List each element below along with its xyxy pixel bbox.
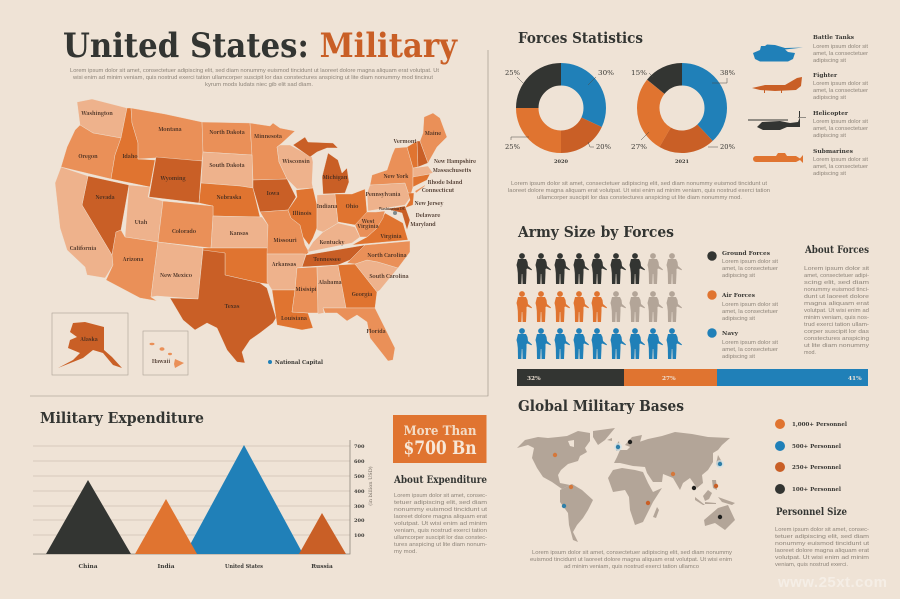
battle tanks text [813,35,868,64]
heading: About Expenditure: About Expenditure [393,475,487,486]
state: Ohio [335,189,367,225]
forces statistics text [508,181,770,201]
state: Arkansas [267,254,306,290]
title: United States: Military [63,26,458,66]
triangle: China [46,480,131,554]
icon: submarine [753,153,803,163]
legend: ground forces: amet, la consectetuer [722,266,778,272]
legend: navy: Lorem ipsum dolor sit [722,340,778,346]
state: Michigan lower [322,153,349,194]
map state labels: Maryland [410,221,436,228]
personnel legend [775,419,848,494]
legend: air forces: Air Forces [721,293,756,299]
about forces text: nonummy euismod tinci- [804,287,869,293]
map state labels: California [70,245,97,252]
forces statistics text: Lorem ipsum dolor sit amet, consectetuer adipiscing elit, sed diam nonummy euismod tincidunt ut [511,181,767,187]
global bases text [530,550,732,570]
Africa [608,468,662,525]
map state labels: Oregon [78,153,98,160]
battle tanks text: amet, la consectetuer [813,51,868,57]
donut chart 2020: 25% [505,69,521,77]
heading: About Forces: About Forces [804,245,869,256]
state: Mississippi [292,267,318,313]
map state labels: South Dakota [209,162,246,169]
about forces text: magna aliquam erat [804,301,869,307]
donut chart 2021 [631,60,736,165]
title intro text [70,68,439,88]
map state labels: Utah [135,219,148,226]
fighter text: Lorem ipsum dolor sit [813,81,868,87]
about forces text: corper suscipit lor das [804,329,869,335]
map state labels: Washington DC [379,206,406,211]
state: Georgia [338,264,377,308]
legend: navy: amet, la consectetuer [722,347,778,353]
forces statistics text: ullamcorper suscipit lor das constectures anspicing ut lite diam nonummy mod. [537,195,742,201]
map state labels: Kansas [230,230,249,237]
legend: ground forces [707,251,778,279]
category labels: China [78,564,98,570]
legend: navy: adipiscing sit [722,354,755,360]
New Guinea [718,497,735,505]
fighter text: amet, la consectetuer [813,88,868,94]
state: Washington [77,99,127,138]
national capital marker on map [393,211,397,215]
Madagascar [653,507,659,518]
heading: Personnel Size: Personnel Size [776,507,847,518]
icon: fighter jet [752,77,802,93]
helicopter text: Helicopter [813,111,849,117]
personnel size text: Lorem ipsum dolor sit amet, consec- [775,527,869,533]
fighter text [813,73,868,101]
state: North Dakota [202,122,252,155]
heading: Military Expenditure: Military Expenditure [40,409,204,427]
soldier icons: navy row [516,328,682,359]
legend: ground forces: Ground Forces [722,251,771,257]
helicopter text: Lorem ipsum dolor sit [813,119,868,125]
map state labels: Arkansas [272,261,297,268]
state: Minnesota [250,123,295,180]
Java [705,502,716,504]
state: New York [370,147,413,198]
stacked percent bar: 27% [662,376,676,382]
icon: battle tank [753,44,803,62]
about expenditure text: my mod. [394,549,417,555]
map state labels: Indiana [317,203,338,210]
state: Kansas [211,216,268,248]
donut chart 2021: 2021 [675,159,689,165]
title intro text: kyrum mods ludats niec gib elit sad diam. [205,82,313,88]
personnel size text: laoreet dolore magna aliquam erat [775,548,869,554]
map state labels: Virginia [357,223,380,230]
state: North Carolina [347,241,410,268]
map state labels: South Carolina [369,273,410,280]
map state labels [70,110,476,335]
state: New Jersey [405,193,414,208]
personnel size text: volutpat. Ut wisi enim ad minim [775,555,869,561]
about expenditure text: tures anspicing ut lite diam nonum- [394,542,487,548]
fighter text: adipiscing sit [813,95,846,101]
triangle: India [135,499,197,554]
about forces text: dunt ut laoreet dolore [804,294,869,300]
map state labels: Connecticut [422,187,455,194]
map state labels: New Jersey [414,200,444,207]
North America [517,431,590,489]
legend: air forces: Lorem ipsum dolor sit [722,302,778,308]
about expenditure text: volutpat. Ut wisi enim ad minim [394,521,487,527]
map state labels: Wyoming [160,175,186,182]
Eurasia [614,432,730,490]
map state labels: Nebraska [217,194,242,201]
callout: More Than $700 Bn [393,415,486,463]
stacked percent bar: 41% [848,376,862,382]
map state labels: Wisconsin [282,158,310,165]
donut chart 2021: 27% [631,143,648,151]
state: Wisconsin [277,145,313,189]
forces statistics text: laoreet dolore magna aliquam erat volutpat. Ut wisi enim ad minim veniam, quis nostrud exerci tation [508,188,770,194]
state: Tennessee [302,245,365,267]
heading: Global Military Bases: Global Military Bases [518,397,684,415]
category labels: India [158,564,175,570]
personnel legend: 500+ Personnel [792,444,842,450]
state: Michigan upper [293,137,338,157]
state: Iowa [253,179,296,212]
map state labels: North Carolina [367,252,408,259]
legend: air forces: adipiscing sit [722,316,755,322]
state: Connecticut and Rhode Island [413,174,430,187]
donut chart 2021: 15% [631,69,648,77]
legend: ground forces: Lorem ipsum dolor sit [722,259,778,265]
state: Pennsylvania [367,183,410,211]
Alaska inset: Alaska [80,336,99,343]
state: Nevada [82,176,129,255]
about expenditure text [394,493,487,555]
state: Colorado [158,201,213,248]
soldier icons: ground forces row [516,253,682,284]
Scandinavia [625,435,642,448]
category labels [78,564,333,570]
map state labels: Tennessee [313,256,341,263]
axis values: 400 [354,489,365,495]
axis values: 200 [354,518,365,524]
state: South Dakota [201,152,253,188]
about forces text: minim veniam, quis nos- [804,315,869,321]
submarines text [813,149,868,177]
state: Idaho [111,108,155,187]
map state labels: Texas [225,303,240,310]
map state labels: Idaho [122,153,138,160]
helicopter text: amet, la consectetuer [813,126,868,132]
battle tanks text: Lorem ipsum dolor sit [813,44,868,50]
legend: air forces [707,290,778,322]
UK [616,441,620,451]
about forces text: volutpat. Ut wisi enim ad [804,308,869,314]
donut chart 2020: 2020 [554,159,568,165]
state: Texas [170,250,276,363]
axis values: 600 [354,459,365,465]
about forces text: constectures anspicing [804,336,869,342]
Sumatra [695,497,705,505]
state: New Hampshire [417,141,428,167]
state: Alabama [317,265,346,314]
category labels: United States [225,564,264,570]
global bases text: Lorem ipsum dolor sit amet, consectetuer adipiscing elit, sed diam nonummy [532,550,732,556]
map state labels: Nevada [95,194,116,201]
state: Virginia [352,213,408,245]
state: California [55,167,113,278]
legend: ground forces: adipiscing sit [722,273,755,279]
about forces text: amet, consectetuer adipi- [804,273,869,279]
axis values [354,444,365,539]
callout: More Than $700 Bn: $700 Bn [404,438,477,459]
axis values: 100 [354,533,365,539]
donut chart 2020: 30% [598,69,615,77]
personnel legend: 250+ Personnel [792,465,842,471]
map state labels: Missouri [273,237,297,244]
state: Nebraska [199,183,260,217]
axis values: 500 [354,474,365,480]
about forces text: scing elit, sed diam [804,280,869,286]
global bases text: euismod tincidunt ut laoreet dolore magna aliquam erat volutpat. Ut wisi enim [530,557,732,563]
axis title: (in billion USD) [367,466,374,506]
state: New Mexico [151,242,203,299]
title intro text: wisi enim ad minim veniam, quis nostrud exerci tation ullamcorper suscipit lor das constectures anspicing ut lite diam nonummy mod tincinut [72,75,433,81]
map state labels: Arizona [123,256,144,263]
map state labels: New Hampshire [434,158,476,165]
donut chart 2021: 38% [720,69,736,77]
map state labels: Rhode Island [428,179,463,186]
state: Florida [323,308,395,361]
about expenditure text: nonummy euismod tincidunt ut [394,507,487,513]
legend: navy [707,328,778,360]
map state labels: Michigan [323,174,348,181]
state: Utah [125,185,163,242]
personnel size text: tetuer adipiscing elit, sed diam [775,534,869,540]
South America [560,484,593,542]
state: Maine [420,113,447,163]
state: South Carolina [355,260,398,292]
map state labels: Massachusetts [433,167,472,174]
Philippines [712,480,717,490]
about expenditure text: laoreet dolore magna aliquam erat [394,514,487,520]
about expenditure text: tetuer adipiscing elit, sed diam [394,500,487,506]
map state labels: Minnesota [254,133,283,140]
personnel size text [775,527,869,568]
about forces text: mod. [804,350,816,356]
Hawaii inset [143,331,188,375]
battle tanks text: adipiscing sit [813,58,846,64]
submarines text: amet, la consectetuer [813,164,868,170]
map state labels: Illinois [293,210,312,217]
about expenditure text: veniam, quis nostrud exerci tation [394,528,487,534]
map state labels: Virginia [380,233,403,240]
watermark: www.25xt.com [777,574,887,591]
map state labels: Georgia [352,291,373,298]
map state labels: West [362,218,375,225]
map state labels: Colorado [172,228,197,235]
heading: Forces Statistics: Forces Statistics [518,29,643,47]
category labels: Russia [311,564,333,570]
national capital legend: National Capital [275,360,324,366]
battle tanks text: Battle Tanks [813,35,855,41]
about forces text: trud exerci tation ullam- [804,322,869,328]
Borneo [703,490,712,501]
map state labels: Kentucky [319,239,345,246]
global bases text: ad minim veniam, quis nostrud exerci tation ullamco [564,564,699,570]
state: Montana [131,108,203,161]
state: Illinois [288,188,317,245]
state: Indiana [317,194,338,232]
map state labels: Montana [158,126,183,133]
state: Maryland and Delaware [376,206,410,230]
personnel legend: 1,000+ Personnel [792,422,848,428]
map state labels: Florida [366,328,387,335]
Iceland [607,438,612,441]
soldier icons: air forces row [516,291,682,322]
personnel size text: nonummy euismod tincidunt ut [775,541,869,547]
state: Massachusetts [413,166,433,178]
map state labels: Misisipi [295,286,317,293]
Greenland [593,428,615,445]
map state labels: Maine [425,130,441,137]
triangle: Russia [299,513,346,554]
state: Oregon [61,125,121,179]
map state labels: Alabama [318,279,343,286]
state: Louisiana [272,290,313,330]
helicopter text [813,111,868,139]
stacked percent bar: 32% [527,376,541,382]
about forces text: Lorem ipsum dolor sit [804,266,869,272]
map state labels: Pennsylvania [366,191,401,198]
base markers on world map [553,440,724,519]
about forces text: ut lite diam nonummy [804,343,869,349]
state: West Virginia [355,211,385,237]
Hudson Bay cutout [568,440,574,447]
about forces text [804,266,869,356]
personnel legend: 100+ Personnel [792,487,842,493]
submarines text: adipiscing sit [813,171,846,177]
about expenditure text: Lorem ipsum dolor sit amet, consec- [394,493,487,499]
world map [517,428,735,542]
map state labels: New Mexico [160,272,193,279]
axis values: 700 [354,444,365,450]
US map [55,99,447,363]
map state labels: New York [383,173,409,180]
frame around map panel [30,50,488,396]
state: Oklahoma [203,248,268,284]
map state labels: Vermont [394,138,417,145]
about expenditure text: ullamcorper suscipit lor das constec- [394,535,487,541]
Australia [704,505,735,530]
axis values: 300 [354,504,365,510]
Alaska inset [52,313,128,375]
state: Kentucky [308,223,360,252]
Hawaii inset: Hawaii [152,358,170,365]
submarines text: Submarines [813,149,854,155]
donut chart 2020: 25% [505,143,521,151]
state: Missouri [260,210,309,255]
icon: helicopter [748,111,806,130]
stacked percent bar [517,369,868,386]
legend: air forces: amet, la consectetuer [722,309,778,315]
personnel size text: veniam, quis nostrud exerci. [775,562,848,568]
heading: Army Size by Forces: Army Size by Forces [517,223,674,241]
callout: More Than $700 Bn: More Than [404,424,477,439]
submarines text: Lorem ipsum dolor sit [813,157,868,163]
fighter text: Fighter [813,73,838,79]
donut chart 2020 [505,63,615,165]
donut chart 2021: 20% [720,143,736,151]
map state labels: Louisiana [281,315,308,322]
donut chart 2020: 20% [596,143,612,151]
map state labels: Iowa [267,190,280,197]
title intro text: Lorem ipsum dolor sit amet, consectetuer adipiscing elit, sed diam nonummy euismod tincidunt ut laoreet dolore magna aliquam erat volutpat. Ut [70,68,439,74]
map state labels: North Dakota [209,129,246,136]
Japan [716,455,722,467]
triangle: United States [185,445,303,554]
map state labels: Delaware [416,212,440,219]
map state labels: Washington [81,110,113,117]
map state labels: Ohio [346,203,359,210]
state: Long Island [415,185,425,193]
helicopter text: adipiscing sit [813,133,846,139]
legend: navy: Navy [722,331,739,337]
state: Vermont [407,141,418,168]
expenditure chart [33,440,374,570]
state: Wyoming [149,157,202,203]
state: Arizona [106,230,158,301]
